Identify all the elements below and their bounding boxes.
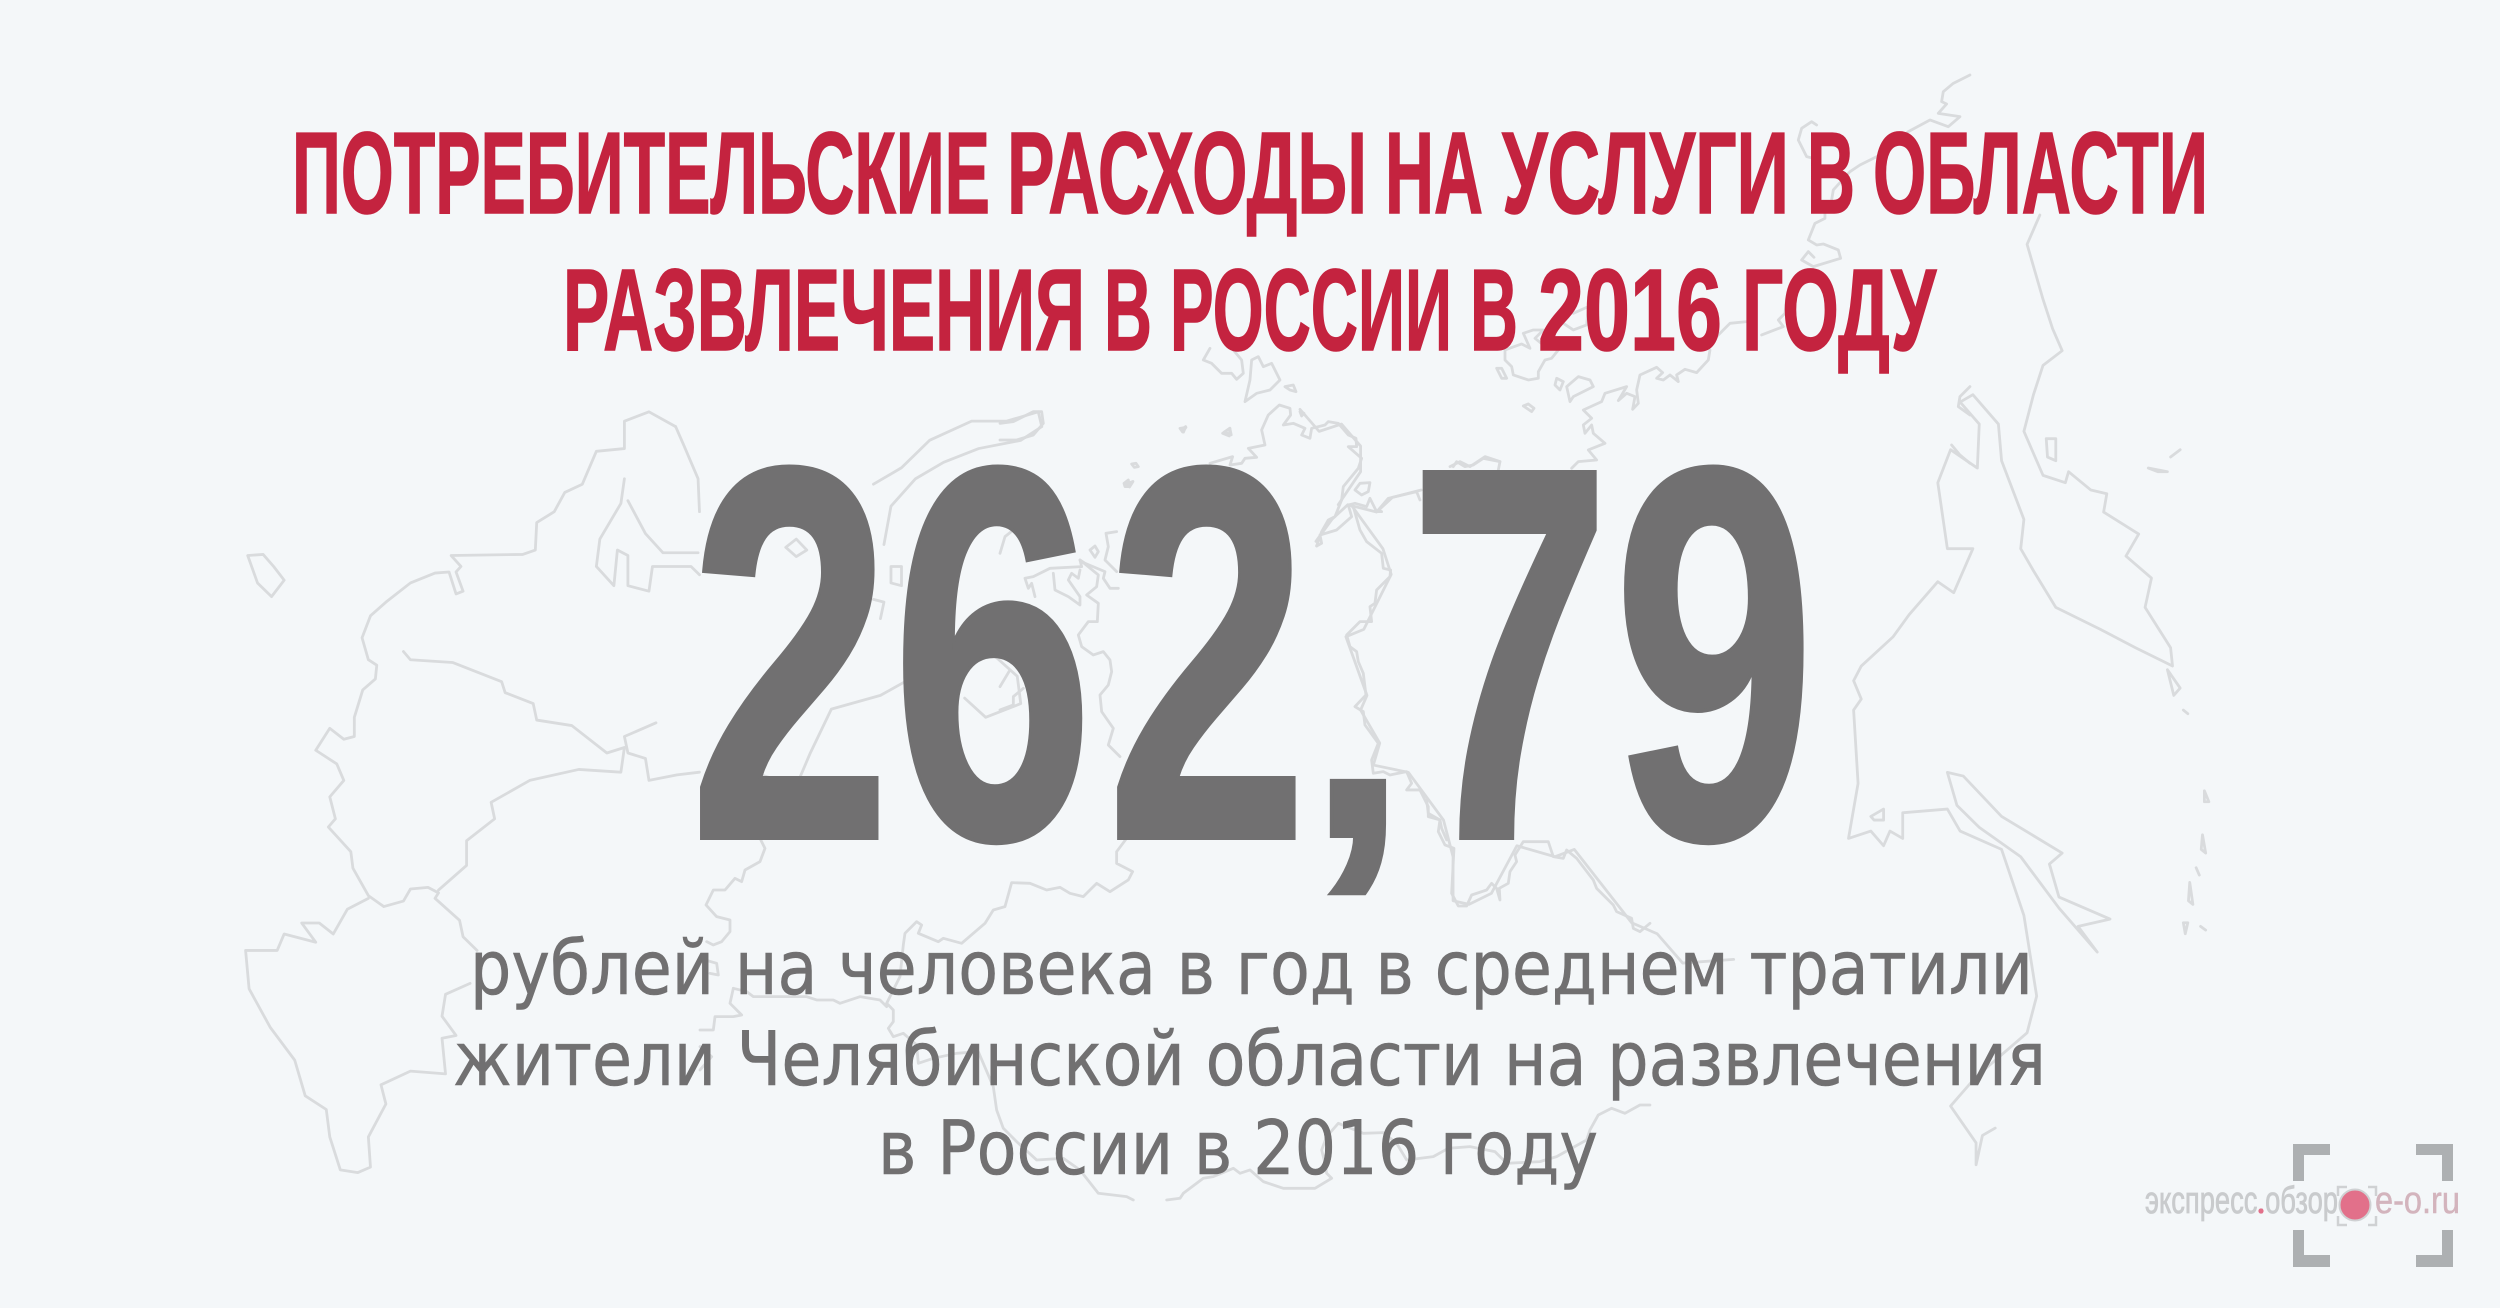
description line 3: в России в 2016 году	[878, 1104, 1598, 1192]
title line 1: В	[1807, 108, 1855, 238]
title line 1: УСЛУГИ	[1502, 108, 1789, 238]
title line 1: ПОТРЕБИТЕЛЬСКИЕ	[292, 108, 990, 238]
digits after comma: 79	[1408, 356, 1816, 951]
logo small frame	[2338, 1187, 2376, 1225]
title line 2: ГОДУ	[1742, 245, 1937, 375]
logo pink dot	[2258, 1208, 2264, 1214]
title line 2: РОССИИ	[1170, 245, 1452, 375]
logo	[2145, 1144, 2460, 1267]
background map of Russia	[246, 75, 2209, 1200]
title line 1: РАСХОДЫ	[1007, 108, 1367, 238]
big number	[689, 356, 1816, 951]
description line 2: жители Челябинской области на развлечения	[453, 1015, 2046, 1103]
logo text right: e-o.ru	[2375, 1180, 2460, 1222]
title line 1: ОБЛАСТИ	[1873, 108, 2208, 238]
description line 1: рублей на человека в год в среднем тратили	[470, 924, 2033, 1012]
title line 2	[563, 245, 1937, 375]
title line 2: РАЗВЛЕЧЕНИЯ	[563, 245, 1085, 375]
logo frame corners	[2293, 1144, 2453, 1267]
comma: ,	[1306, 502, 1409, 915]
title line 2: 2016	[1538, 245, 1722, 375]
logo circle	[2340, 1190, 2370, 1220]
title line 1: НА	[1385, 108, 1483, 238]
title	[292, 108, 2208, 375]
title line 2: В	[1470, 245, 1518, 375]
digits before comma: 262	[689, 356, 1309, 951]
logo text left: экспресс.обзор	[2145, 1180, 2338, 1222]
description text	[453, 924, 2046, 1192]
title line 1	[292, 108, 2208, 238]
title line 2: В	[1104, 245, 1152, 375]
